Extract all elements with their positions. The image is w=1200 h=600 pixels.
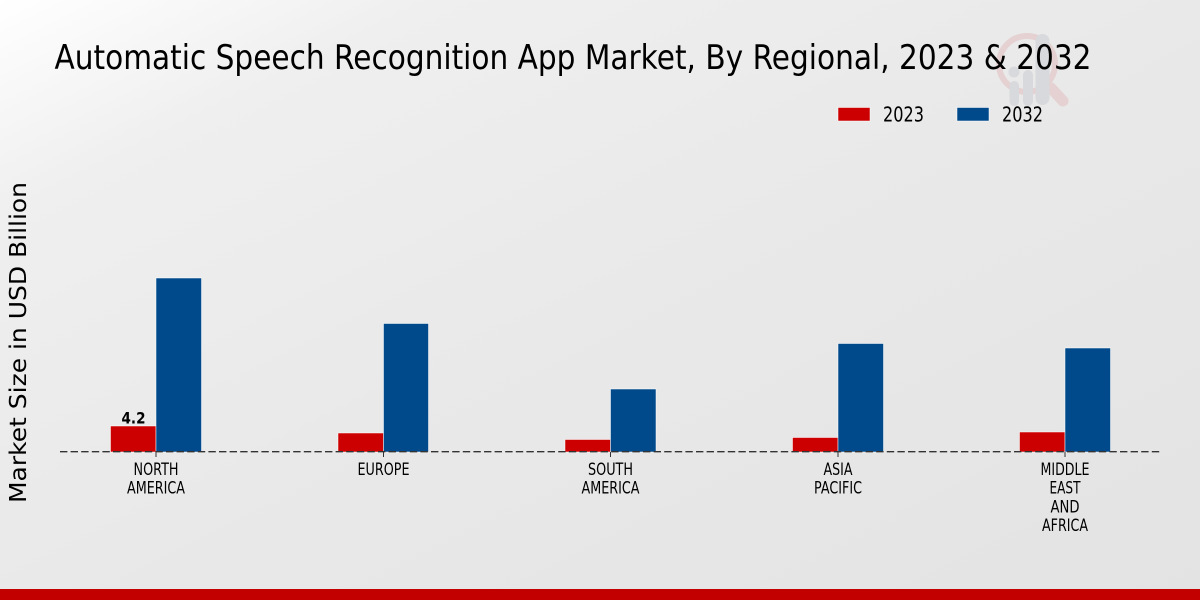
bars: Middle East and Africa xyxy=(1020,348,1110,452)
bars: North America xyxy=(110,278,202,452)
value label 4.2: 4.2 xyxy=(122,408,146,428)
legend label 2023: 2023 xyxy=(883,102,924,126)
legend swatch 2032 xyxy=(957,108,989,121)
label: Middle East and Africa: EAST xyxy=(1050,478,1081,498)
label: South America: SOUTH xyxy=(588,460,633,480)
label: Middle East and Africa xyxy=(1040,460,1090,536)
label: South America: AMERICA xyxy=(582,478,640,498)
legend xyxy=(838,102,1043,126)
label: Europe: EUROPE xyxy=(358,460,410,480)
label: Asia Pacific xyxy=(814,460,862,498)
watermark logo xyxy=(999,34,1063,106)
bar chart xyxy=(60,278,1160,457)
label: North America: NORTH xyxy=(134,460,178,480)
label: Asia Pacific: ASIA xyxy=(824,460,853,480)
label: Middle East and Africa: AND xyxy=(1050,498,1080,518)
label: Asia Pacific: PACIFIC xyxy=(814,478,862,498)
bars: Asia Pacific xyxy=(792,344,884,452)
label: South America xyxy=(582,460,640,498)
bars: Europe xyxy=(338,324,428,452)
bottom red band xyxy=(0,589,1200,600)
y axis label: Market Size in USD Billion xyxy=(4,182,32,503)
legend label 2032: 2032 xyxy=(1002,102,1043,126)
legend swatch 2023 xyxy=(838,108,870,121)
x axis category labels xyxy=(127,460,1090,536)
label: Middle East and Africa: MIDDLE xyxy=(1040,460,1090,480)
label: Middle East and Africa: AFRICA xyxy=(1042,516,1088,536)
label: North America: AMERICA xyxy=(127,478,185,498)
bars: South America xyxy=(565,389,656,452)
label: North America xyxy=(127,460,185,498)
